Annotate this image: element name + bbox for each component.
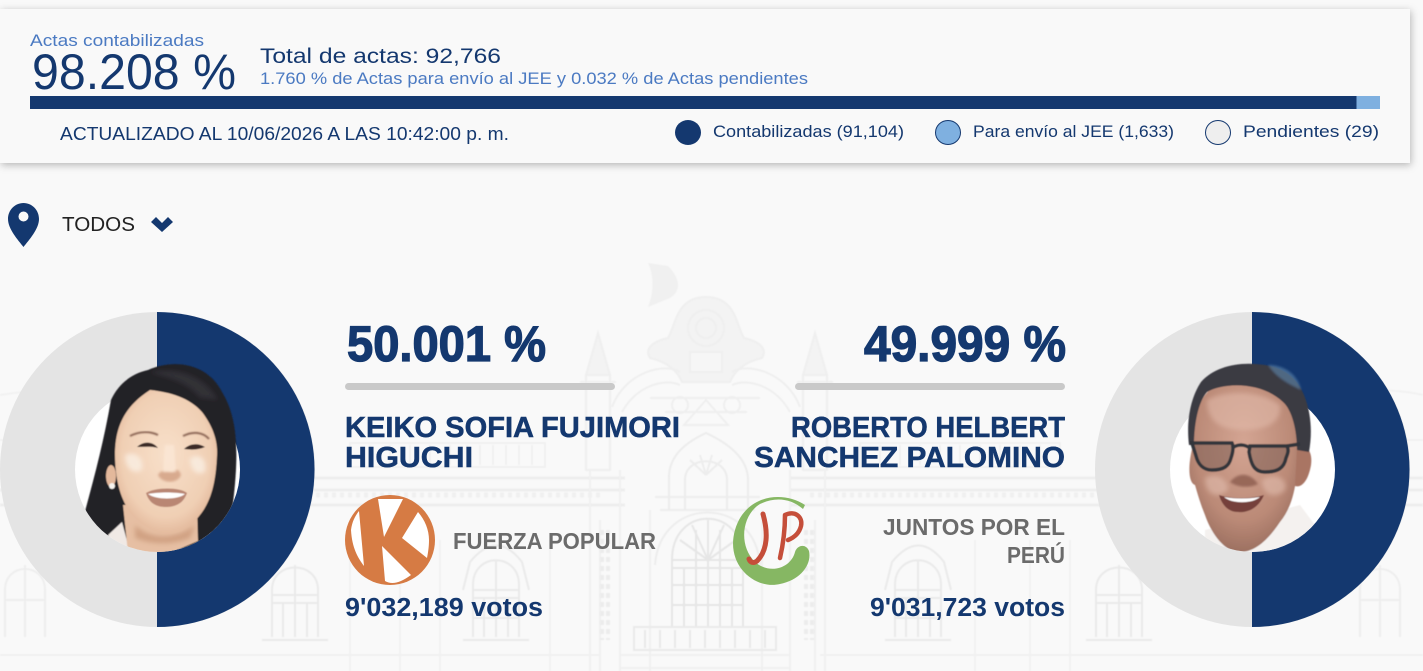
party name: PERÚ	[1007, 541, 1065, 568]
votes: 9'031,723 votos	[870, 594, 1065, 622]
logo: Juntos por el Peru	[733, 497, 809, 585]
icon: chevron down	[151, 217, 173, 232]
todos label: TODOS	[62, 214, 135, 236]
total actas: Total de actas: 92,766	[260, 44, 501, 68]
panel: actas summary	[0, 9, 1410, 163]
logo: Fuerza Popular	[345, 495, 435, 585]
candidate name: KEIKO SOFIA FUJIMORI	[345, 412, 680, 444]
side windows	[463, 546, 529, 640]
column: Roberto Sanchez results	[733, 316, 1066, 622]
party name: JUNTOS POR EL	[883, 514, 1065, 540]
candidate name	[754, 412, 1065, 474]
party name	[883, 514, 1065, 568]
legend: pendientes	[1206, 120, 1379, 144]
central niche	[669, 433, 748, 510]
location filter	[8, 203, 173, 247]
candidate name: ROBERTO HELBERT	[791, 412, 1065, 444]
label: actas contabilizadas: Actas contabilizadas	[30, 31, 204, 50]
donut: Roberto Sanchez	[1095, 312, 1410, 627]
legend: para envio al JEE: Para envío al JEE (1,633)	[973, 122, 1174, 141]
palace background illustration	[0, 263, 1423, 671]
separator bar	[345, 383, 615, 390]
icon: map pin	[8, 203, 39, 247]
candidate name	[345, 412, 680, 474]
candidate name: SANCHEZ PALOMINO	[754, 442, 1065, 474]
candidate name: HIGUCHI	[345, 442, 473, 474]
progress bar	[30, 96, 1380, 109]
legend: pendientes: Pendientes (29)	[1243, 122, 1379, 141]
party name: FUERZA POPULAR	[453, 528, 656, 554]
central window	[672, 519, 743, 627]
column: Keiko Fujimori results	[345, 316, 680, 622]
legend: contabilizadas	[675, 120, 904, 145]
legend: para envio al JEE	[936, 120, 1174, 144]
portrait: Keiko Fujimori	[84, 364, 236, 553]
percent counted: 98.208 %	[32, 44, 236, 100]
separator bar	[795, 383, 1065, 390]
votes: 9'032,189 votos	[345, 594, 543, 622]
balustrades	[350, 443, 1060, 467]
note on JEE and pending: 1.760 % de Actas para envío al JEE y 0.032 % de Actas pendientes	[260, 70, 808, 88]
update timestamp: ACTUALIZADO AL 10/06/2026 A LAS 10:42:00 p. m.	[60, 123, 509, 144]
donut: Keiko Fujimori	[0, 312, 315, 627]
legend: contabilizadas: Contabilizadas (91,104)	[713, 122, 904, 141]
percentage: 49.999 %	[864, 316, 1066, 372]
portrait: Roberto Sanchez	[1187, 362, 1314, 552]
percentage: 50.001 %	[347, 316, 546, 372]
